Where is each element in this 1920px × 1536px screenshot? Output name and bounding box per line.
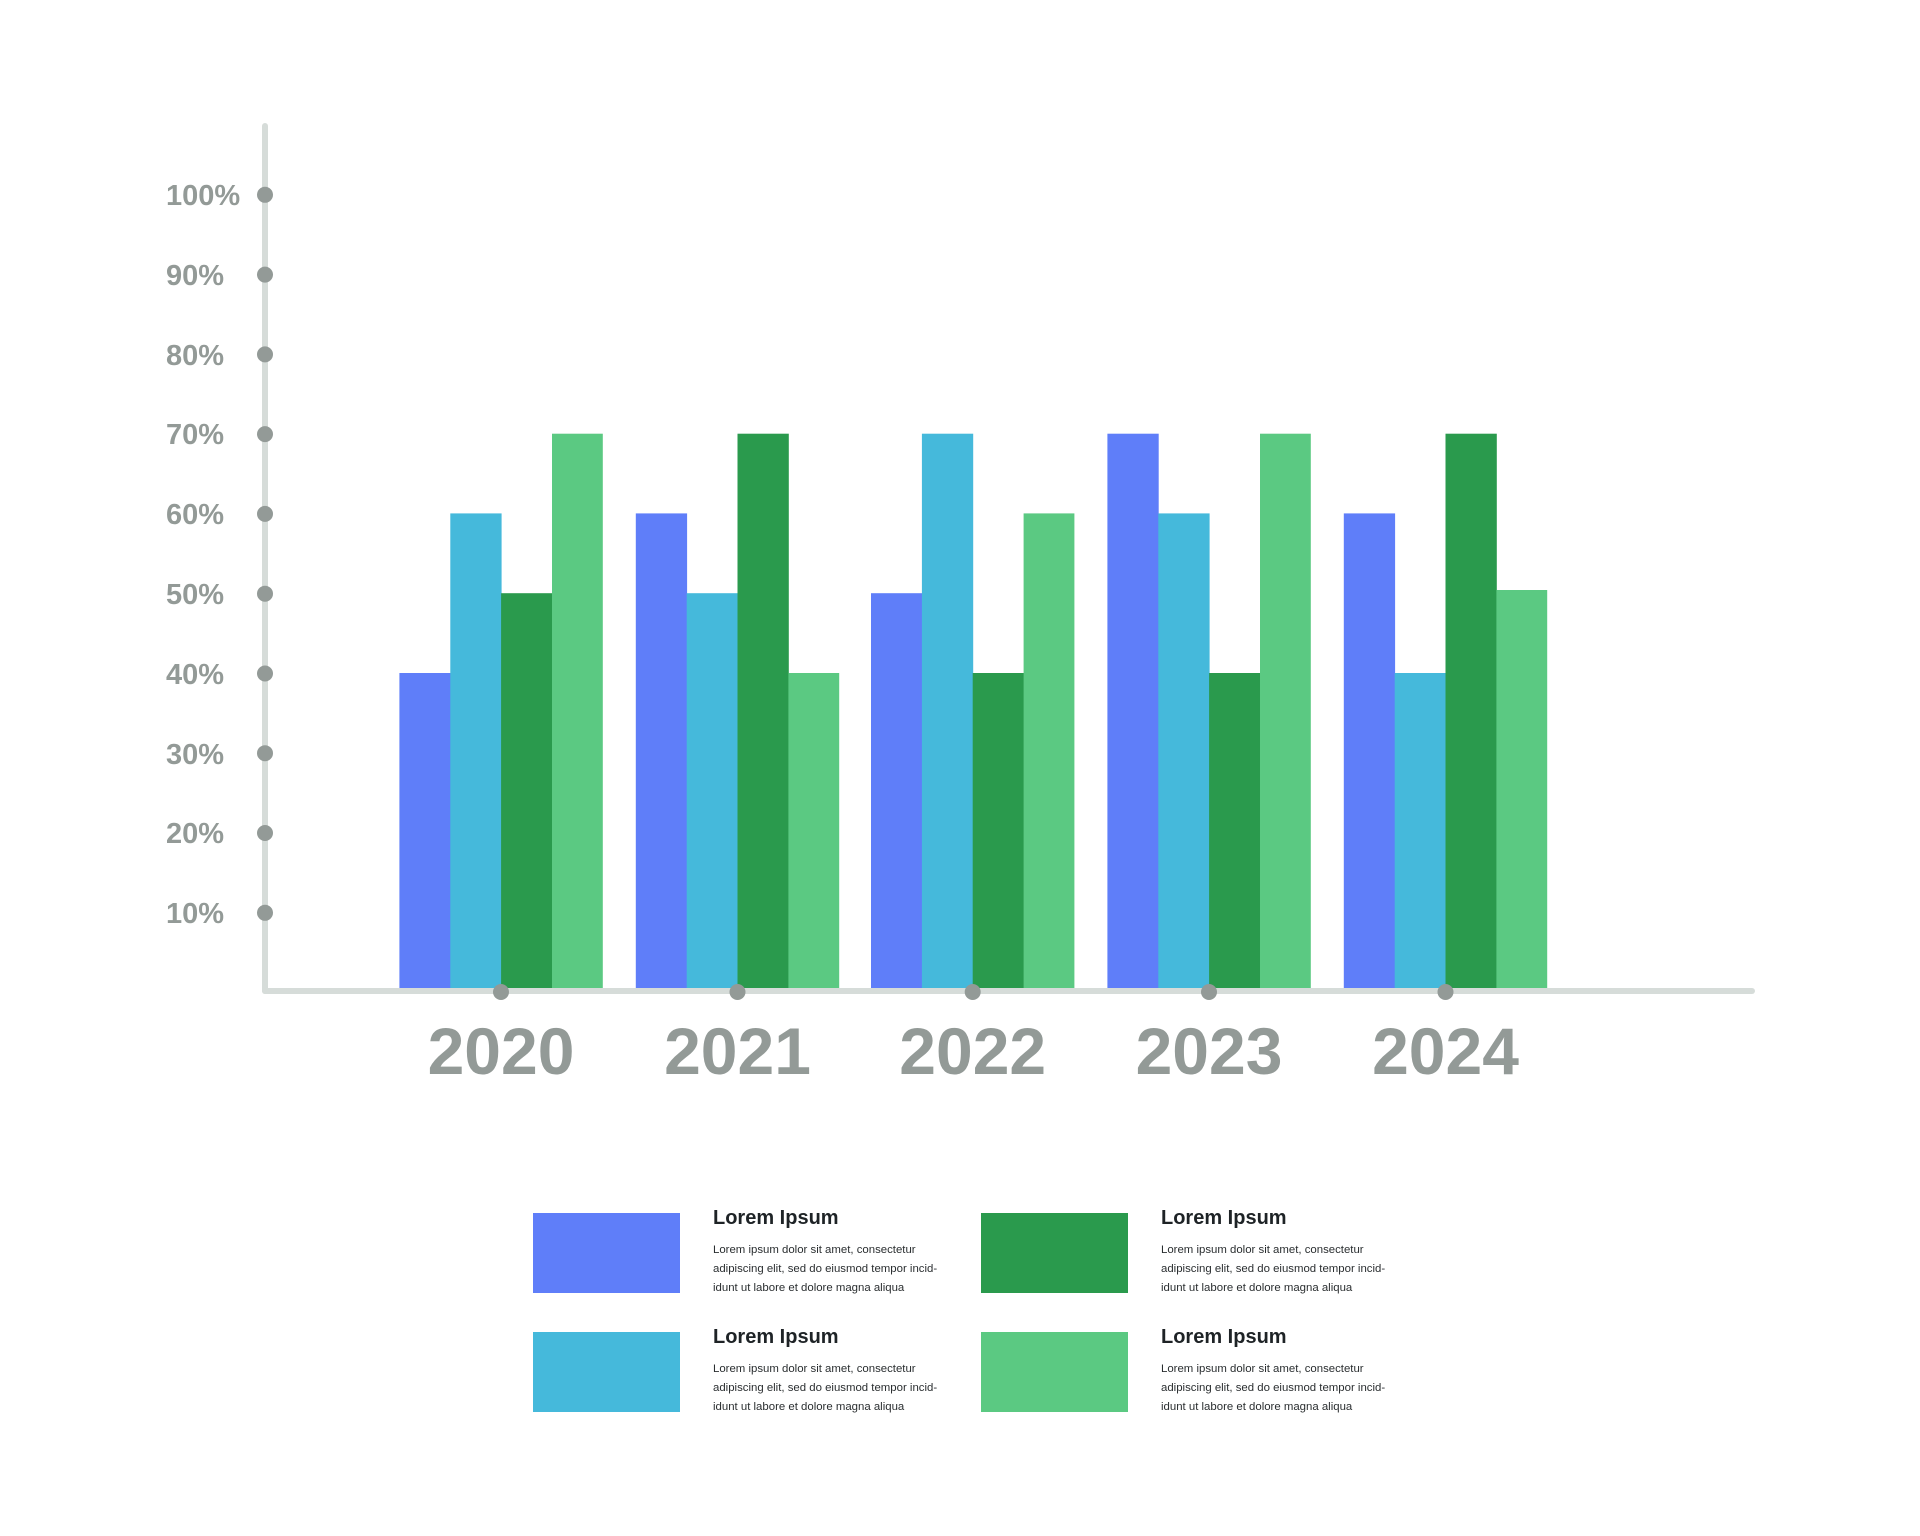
legend item: light green: Lorem Ipsum (1161, 1326, 1287, 1348)
y axis labels and ticks: 80% (166, 340, 224, 372)
y axis labels and ticks: 40% (166, 659, 224, 691)
y axis labels and ticks: 60% (166, 499, 224, 531)
legend item: cyan: idunt ut labore et dolore magna aliqua (713, 1401, 904, 1413)
legend item: dark green: idunt ut labore et dolore magna aliqua (1161, 1282, 1352, 1294)
bars: 2022 (871, 434, 1074, 988)
y axis labels and ticks: 50% (166, 579, 224, 611)
legend item: dark green: Lorem Ipsum (1161, 1207, 1287, 1229)
legend item: light green: Lorem ipsum dolor sit amet, consectetur (1161, 1363, 1364, 1375)
x axis year labels: 2022 (899, 1014, 1046, 1088)
legend item: dark green: Lorem ipsum dolor sit amet, consectetur (1161, 1244, 1364, 1256)
x axis year labels: 2020 (428, 1014, 574, 1088)
x axis year labels: 2021 (664, 1014, 811, 1088)
legend item: light green: adipiscing elit, sed do eiusmod tempor incid- (1161, 1382, 1385, 1394)
y axis labels and ticks: 70% (166, 419, 224, 451)
legend item: cyan: Lorem Ipsum (713, 1326, 839, 1348)
y axis labels and ticks: 20% (166, 818, 224, 850)
legend item: blue: Lorem Ipsum (713, 1207, 839, 1229)
y axis labels and ticks: 10% (166, 898, 224, 930)
y axis labels and ticks: 90% (166, 260, 224, 292)
legend item: blue (533, 1207, 937, 1294)
legend item: blue: idunt ut labore et dolore magna aliqua (713, 1282, 904, 1294)
legend item: light green (981, 1326, 1385, 1413)
axes (265, 126, 1752, 991)
legend item: cyan (533, 1326, 937, 1413)
bar chart (166, 123, 1755, 1088)
legend item: cyan: adipiscing elit, sed do eiusmod tempor incid- (713, 1382, 937, 1394)
legend item: cyan: Lorem ipsum dolor sit amet, consectetur (713, 1363, 916, 1375)
x axis year labels (428, 984, 1519, 1088)
legend item: blue: adipiscing elit, sed do eiusmod tempor incid- (713, 1263, 937, 1275)
legend item: blue: Lorem ipsum dolor sit amet, consectetur (713, 1244, 916, 1256)
legend item: dark green (981, 1207, 1385, 1294)
y axis labels and ticks: 100% (166, 180, 240, 212)
bars: 2023 (1107, 434, 1311, 988)
y axis labels and ticks: 30% (166, 739, 224, 771)
bars: 2020 (399, 434, 603, 988)
legend (533, 1207, 1385, 1413)
bars: 2021 (636, 434, 839, 988)
legend item: dark green: adipiscing elit, sed do eiusmod tempor incid- (1161, 1263, 1385, 1275)
x axis year labels: 2023 (1136, 1014, 1282, 1088)
legend item: light green: idunt ut labore et dolore magna aliqua (1161, 1401, 1352, 1413)
bars: 2024 (1344, 434, 1547, 988)
y axis labels and ticks (166, 180, 273, 930)
x axis year labels: 2024 (1372, 1014, 1519, 1088)
